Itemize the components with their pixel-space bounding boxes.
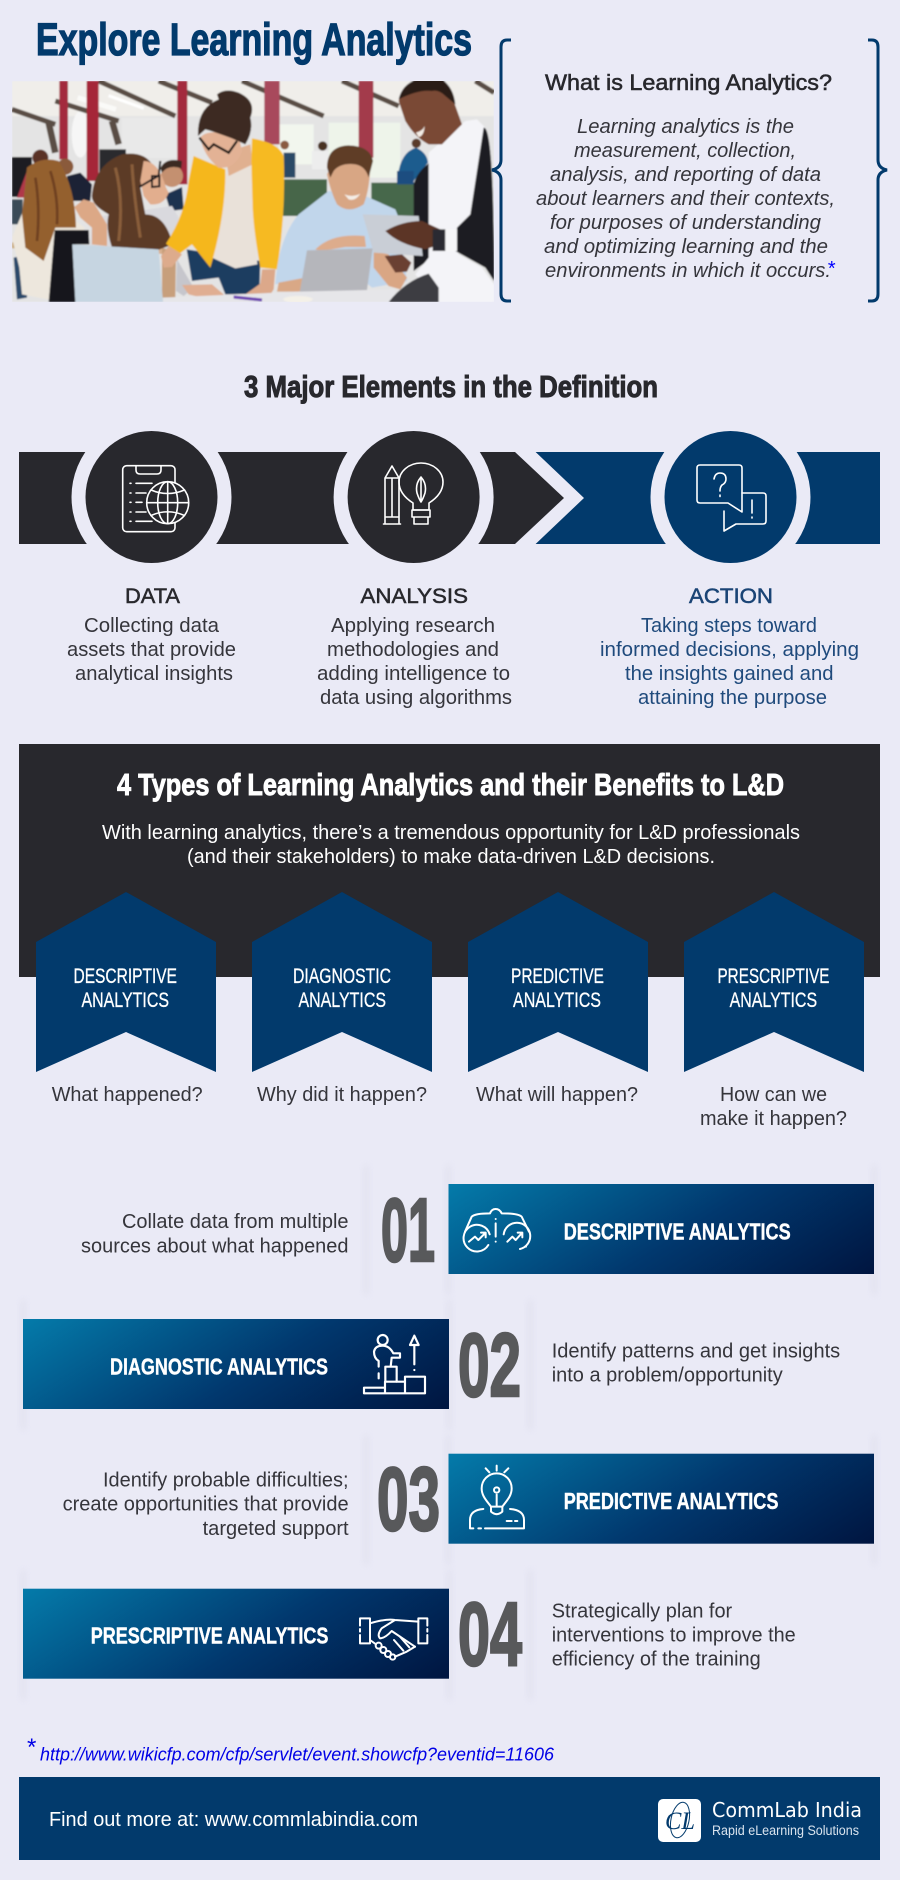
footnote asterisk: * (827, 258, 836, 280)
analysis description: Applying research (331, 615, 495, 637)
data description: assets that provide (67, 639, 236, 661)
card label (293, 965, 391, 1012)
icon: person climbing steps (364, 1335, 425, 1393)
bar label: DIAGNOSTIC ANALYTICS (110, 1354, 328, 1380)
definition body: measurement, collection, (574, 140, 796, 162)
row text: Identify patterns and get insights (552, 1340, 840, 1362)
row 02: diagnostic analytics (23, 1316, 840, 1416)
gradient bar (23, 1589, 449, 1679)
label: ANALYSIS: ANALYSIS (360, 585, 468, 608)
panel intro text: (and their stakeholders) to make data-driven L&D decisions. (187, 846, 715, 868)
card label (718, 965, 830, 1012)
bar label: PREDICTIVE ANALYTICS (564, 1488, 778, 1514)
title: Explore Learning Analytics (36, 14, 472, 65)
definition heading: What is Learning Analytics? (545, 70, 832, 95)
label: ACTION: ACTION (689, 585, 773, 608)
type card: prescriptive (684, 892, 864, 1130)
icon: binoculars with trend arrows (464, 1209, 530, 1251)
action description: attaining the purpose (638, 687, 827, 709)
analysis description (317, 615, 512, 709)
footer call to action: Find out more at: www.commlabindia.com (49, 1809, 418, 1831)
type card: predictive (468, 892, 648, 1106)
panel heading: 4 Types of Learning Analytics and their Benefits to L&D (117, 768, 784, 802)
card question (700, 1084, 847, 1130)
definition body: for purposes of understanding (550, 212, 821, 234)
icon: pencil and light bulb (384, 463, 443, 524)
analysis description: methodologies and (327, 639, 499, 661)
row text: Strategically plan for (552, 1601, 733, 1623)
brand tagline: Rapid eLearning Solutions (712, 1823, 859, 1838)
row text (552, 1601, 796, 1671)
number 01: 01 (381, 1181, 435, 1281)
row text: Collate data from multiple (122, 1211, 348, 1233)
footnote source: http://www.wikicfp.com/cfp/servlet/event.showcfp?eventid=11606 (40, 1745, 555, 1765)
section heading: 3 major elements: 3 Major Elements in the Definition (244, 370, 658, 404)
data description: analytical insights (75, 663, 233, 685)
card label: ANALYTICS (298, 989, 386, 1012)
brand name: CommLab India (712, 1798, 862, 1822)
icon: handshake (360, 1618, 427, 1660)
data description: Collecting data (84, 615, 220, 637)
element: analysis (317, 417, 512, 709)
card label (511, 965, 604, 1012)
footer bar (19, 1777, 880, 1860)
row text: Identify probable difficulties; (103, 1470, 348, 1492)
gradient bar (448, 1454, 874, 1544)
row 04: prescriptive analytics (23, 1585, 796, 1685)
row text: efficiency of the training (552, 1649, 761, 1671)
card label (74, 965, 177, 1012)
icon: phone with globe (123, 466, 189, 532)
gradient bar (23, 1319, 449, 1409)
card label: ANALYTICS (82, 989, 169, 1012)
analysis description: adding intelligence to (317, 663, 510, 685)
definition body: and optimizing learning and the (544, 236, 828, 258)
analysis description: data using algorithms (320, 687, 512, 709)
card question: What happened? (52, 1084, 203, 1106)
card label: DIAGNOSTIC (293, 965, 391, 988)
logo mark (658, 1799, 701, 1842)
row text (552, 1340, 840, 1387)
row 03: predictive analytics (63, 1450, 874, 1550)
definition body: environments in which it occurs. (545, 260, 831, 282)
card label: DESCRIPTIVE (74, 965, 177, 988)
row text: sources about what happened (81, 1236, 348, 1258)
type card: diagnostic (252, 892, 432, 1106)
row 01: descriptive analytics (81, 1181, 874, 1281)
right curly brace (868, 40, 887, 301)
data description (67, 615, 236, 685)
gradient bar (448, 1184, 874, 1274)
card question: What will happen? (476, 1084, 638, 1106)
action description: informed decisions, applying (600, 639, 859, 661)
number 02: 02 (458, 1316, 521, 1416)
logo mark: CL (665, 1808, 695, 1835)
definition text block (536, 70, 836, 282)
type card: descriptive (36, 892, 216, 1106)
card label: ANALYTICS (513, 989, 601, 1012)
footnote source (26, 1734, 555, 1765)
definition body: about learners and their contexts, (536, 188, 835, 210)
element: action (600, 417, 859, 709)
row text: into a problem/opportunity (552, 1365, 783, 1387)
row text: create opportunities that provide (63, 1494, 349, 1516)
definition body: Learning analytics is the (577, 116, 794, 138)
row text: targeted support (203, 1518, 349, 1540)
left curly brace (492, 40, 511, 301)
arrow band: dark segment (19, 452, 564, 544)
action description (600, 615, 859, 709)
card label: ANALYTICS (730, 989, 817, 1012)
card question: Why did it happen? (257, 1084, 427, 1106)
element: data (67, 417, 236, 685)
card question: make it happen? (700, 1108, 847, 1130)
card label: PREDICTIVE (511, 965, 604, 988)
bar label: PRESCRIPTIVE ANALYTICS (91, 1622, 328, 1648)
definition body (536, 116, 835, 282)
panel intro text: With learning analytics, there’s a tremendous opportunity for L&D professionals (102, 822, 800, 844)
photo: team reviewing data around laptops (12, 79, 494, 303)
card question: How can we (720, 1084, 827, 1106)
panel: 4 types of learning analytics (19, 744, 880, 977)
label: DATA: DATA (125, 585, 180, 608)
row text: interventions to improve the (552, 1625, 796, 1647)
action description: the insights gained and (625, 663, 834, 685)
icon: person with idea bulb (470, 1466, 524, 1528)
footnote source: * (26, 1734, 36, 1761)
bar label: DESCRIPTIVE ANALYTICS (564, 1218, 791, 1244)
row text (63, 1470, 349, 1540)
panel intro text (102, 822, 800, 868)
number 04: 04 (458, 1585, 522, 1685)
number 03: 03 (377, 1450, 440, 1550)
arrow band: navy segment (536, 452, 880, 544)
definition body: analysis, and reporting of data (550, 164, 821, 186)
row text (81, 1211, 348, 1258)
icon: question and answer chat bubbles (697, 465, 766, 531)
card label: PRESCRIPTIVE (718, 965, 830, 988)
action description: Taking steps toward (641, 615, 817, 637)
